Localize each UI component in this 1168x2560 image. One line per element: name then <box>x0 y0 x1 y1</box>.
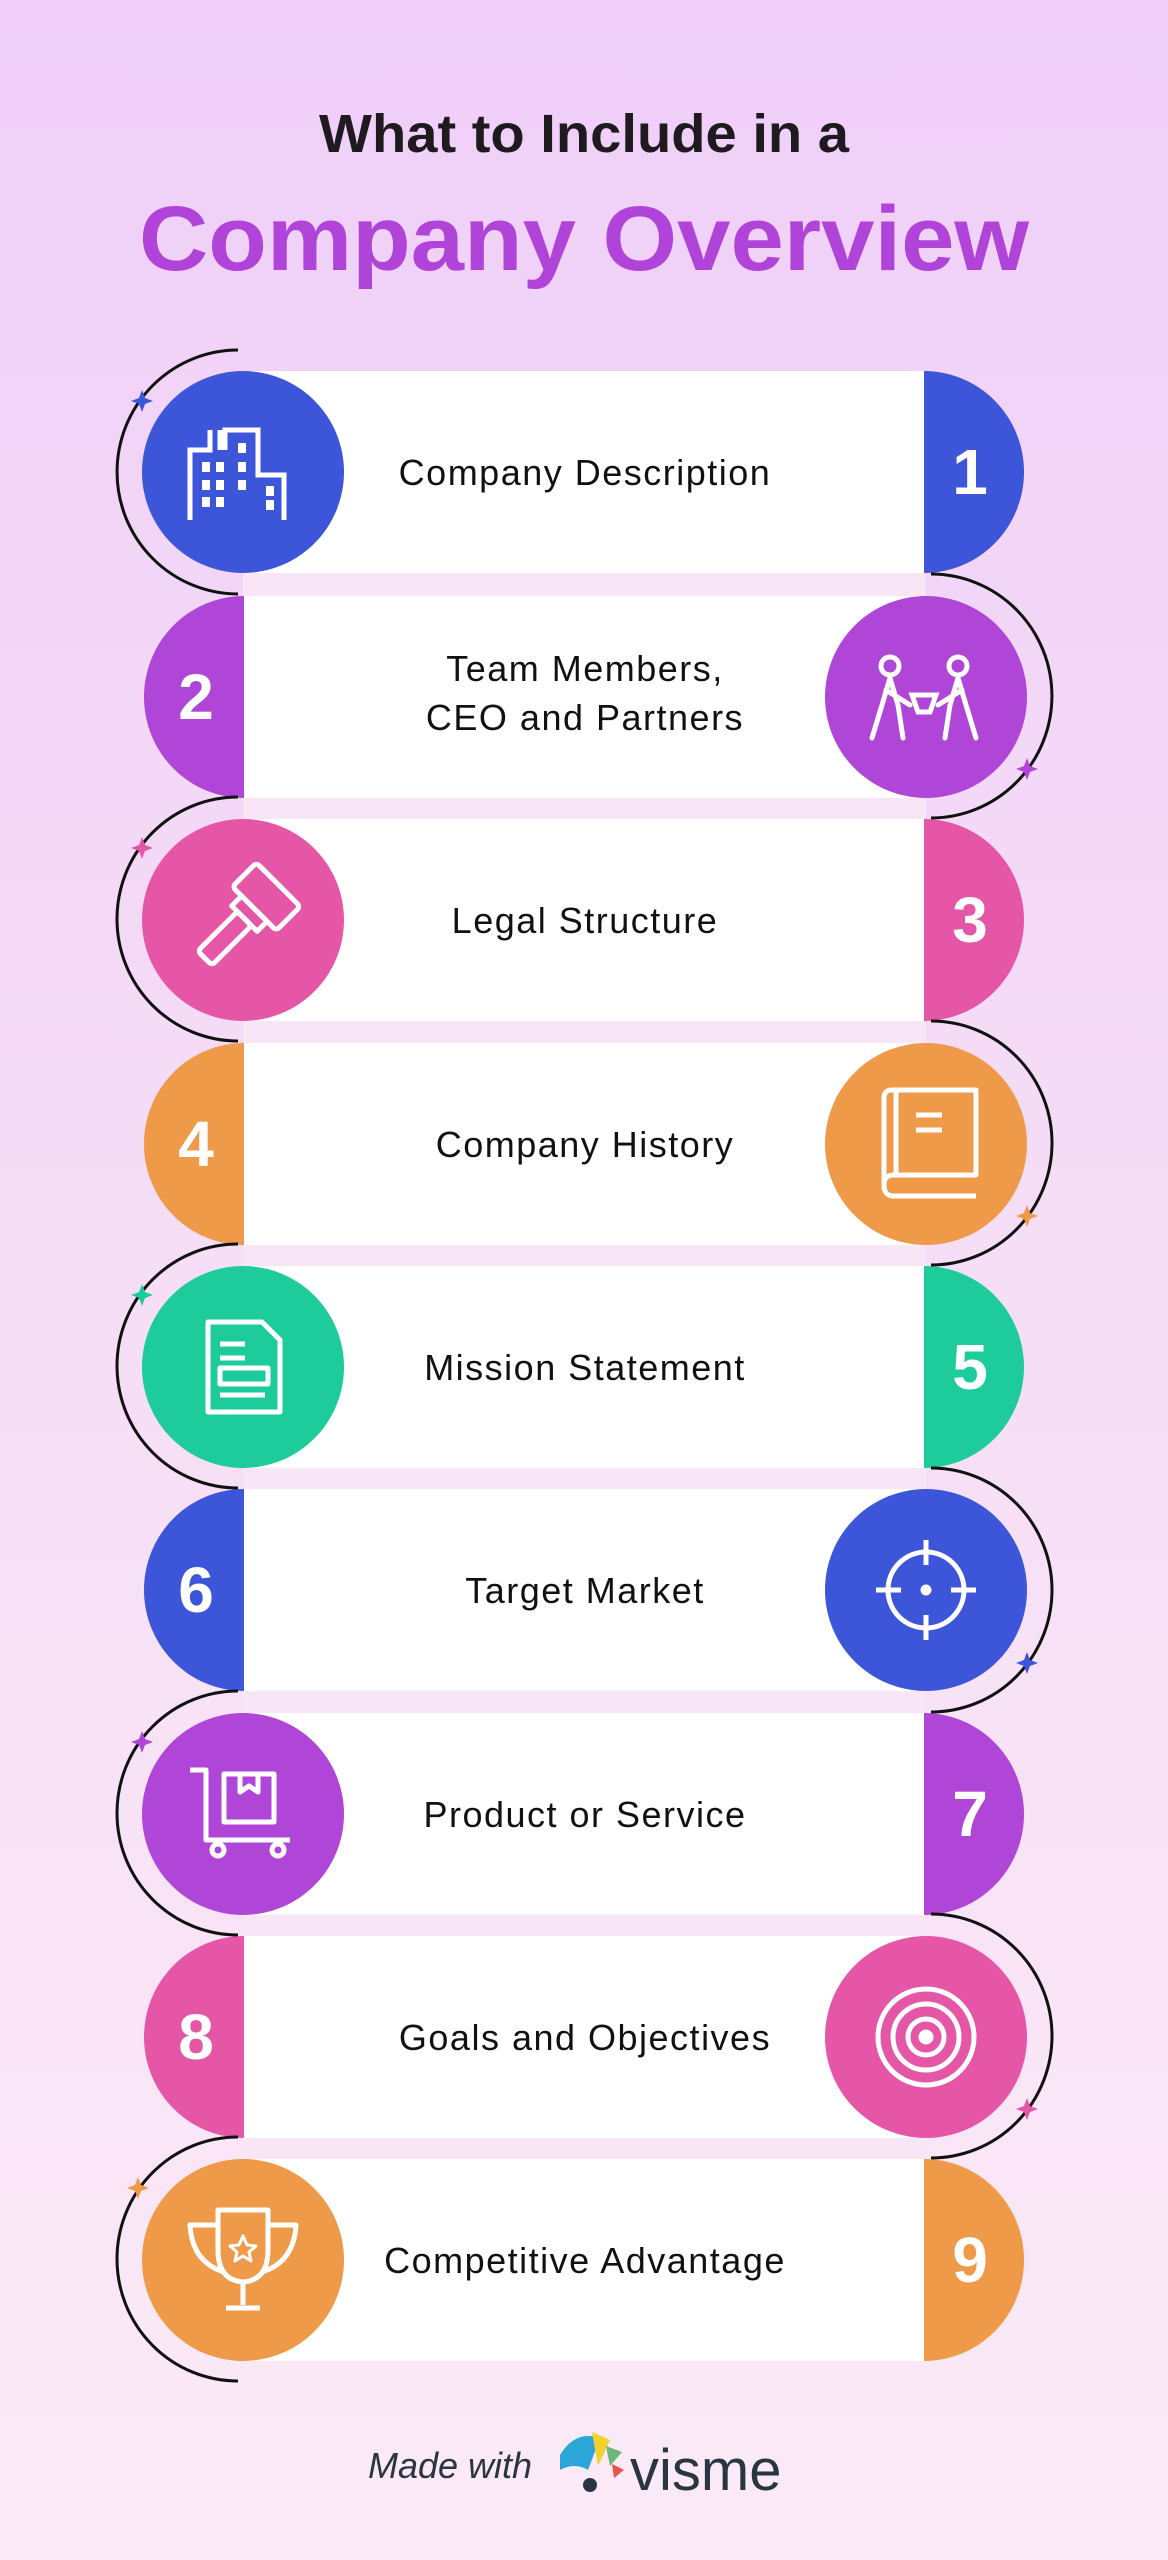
light connector bands <box>243 573 926 2159</box>
row 9: Competitive Advantage: 9 <box>952 2224 988 2296</box>
row 6: Target Market: 6 <box>178 1554 214 1626</box>
row 9: Competitive Advantage: Competitive Advantage <box>384 2240 786 2281</box>
icon: book <box>884 1090 976 1196</box>
icon: target <box>878 1989 974 2085</box>
row 8: Goals and Objectives: Goals and Objectives <box>399 2017 771 2058</box>
row 3: Legal Structure <box>117 797 1024 1041</box>
row 5: Mission Statement <box>117 1244 1024 1488</box>
footer: made with visme: Made with <box>368 2445 532 2486</box>
row 9: Competitive Advantage <box>117 2137 1024 2381</box>
row 7: Product or Service: Product or Service <box>423 1794 747 1835</box>
icon: trophy <box>190 2210 296 2308</box>
icon: gavel <box>183 863 300 980</box>
icon: visme logo <box>560 2432 624 2492</box>
row 4: Company History <box>144 1021 1052 1265</box>
icon: building <box>190 430 284 520</box>
row 4: Company History: Company History <box>436 1124 734 1165</box>
row 6: Target Market <box>144 1468 1052 1712</box>
footer: made with visme: visme <box>630 2438 781 2503</box>
row 8: Goals and Objectives: 8 <box>178 2001 214 2073</box>
row 1: Company Description: 1 <box>952 436 988 508</box>
row 5: Mission Statement: 5 <box>952 1331 988 1403</box>
row 2: Team Members: CEO and Partners <box>426 697 744 738</box>
title line 1: What to Include in a <box>319 104 850 164</box>
row 1: Company Description <box>117 350 1024 594</box>
icon: crosshair <box>876 1540 976 1640</box>
row 2: Team Members: Team Members, <box>446 648 724 689</box>
row 6: Target Market: Target Market <box>465 1570 705 1611</box>
row 3: Legal Structure: 3 <box>952 884 988 956</box>
footer: made with visme <box>368 2432 781 2503</box>
icon: document <box>208 1322 280 1412</box>
row 4: Company History: 4 <box>178 1108 214 1180</box>
row 1: Company Description: Company Description <box>399 452 771 493</box>
row 7: Product or Service: 7 <box>952 1778 988 1850</box>
row 3: Legal Structure: Legal Structure <box>452 900 718 941</box>
row 8: Goals and Objectives <box>144 1914 1052 2158</box>
row 2: Team Members <box>144 574 1052 818</box>
icon: two people carrying <box>872 657 976 738</box>
row 5: Mission Statement: Mission Statement <box>424 1347 746 1388</box>
row 2: Team Members: 2 <box>178 661 214 733</box>
row 7: Product or Service <box>117 1691 1024 1935</box>
icon: cart with box <box>190 1770 290 1856</box>
title line 2: Company Overview <box>139 188 1029 290</box>
